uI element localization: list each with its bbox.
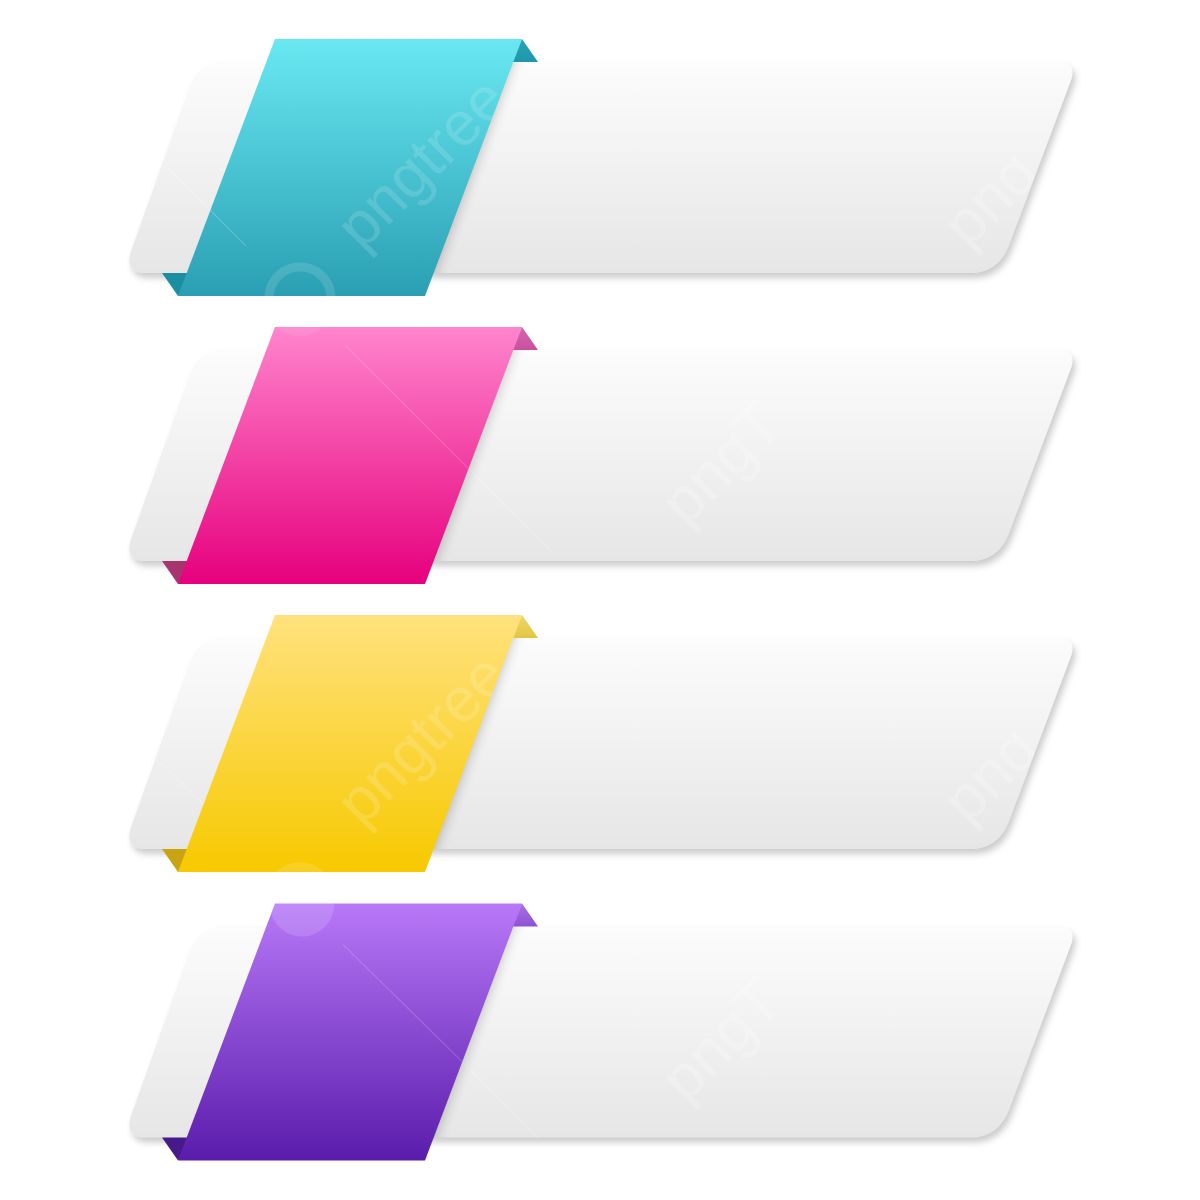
ribbon: cyan bbox=[178, 39, 522, 296]
watermark: card 1 bbox=[170, 138, 1051, 260]
panel: white card 1 bbox=[129, 62, 1072, 273]
watermark: ribbon 1: pngtree bbox=[323, 64, 521, 262]
watermark: ribbon 3 bbox=[276, 664, 498, 872]
banner row 2: pink bbox=[129, 327, 1078, 584]
watermark: card 4 bbox=[462, 966, 796, 1140]
banner row 1: cyan bbox=[129, 39, 1072, 329]
ribbon: purple bbox=[178, 904, 522, 1160]
watermark: card 3 bbox=[160, 714, 1051, 842]
ribbon shadow 2 bbox=[434, 350, 520, 561]
ribbon: pink bbox=[178, 327, 522, 584]
watermark line: ribbon 2 bbox=[278, 327, 468, 468]
panel: white card 4 bbox=[129, 926, 1072, 1138]
ribbon fold: bottom left 2 bbox=[162, 561, 188, 584]
ribbon fold: bottom left 3 bbox=[162, 849, 188, 872]
banner row 4: purple bbox=[129, 904, 1078, 1160]
ribbon fold: top right 3 bbox=[513, 615, 538, 638]
panel: white card 3 bbox=[129, 638, 1072, 849]
ribbon shadow 3 bbox=[434, 638, 520, 849]
watermark: ribbon 1 bbox=[210, 88, 498, 296]
panel: white card 2 bbox=[129, 350, 1072, 561]
ribbon fold: bottom left 1 bbox=[162, 273, 188, 296]
ribbon fold: top right 4 bbox=[513, 904, 538, 926]
watermark: ribbon 3: pngtree bbox=[323, 640, 521, 838]
watermark: card 2 bbox=[468, 389, 796, 550]
watermark: card 2: pngT bbox=[647, 389, 796, 538]
watermark logo: ribbon 4 bbox=[272, 904, 462, 1062]
banner row 3: yellow bbox=[129, 615, 1072, 929]
ribbon shadow 4 bbox=[434, 926, 520, 1138]
watermark: card 4: pngT bbox=[647, 966, 796, 1114]
ribbon fold: bottom left 4 bbox=[162, 1138, 188, 1160]
ribbon fold: top right 1 bbox=[513, 39, 538, 62]
watermark: card 1: png bbox=[929, 138, 1051, 260]
ribbon: yellow bbox=[178, 615, 522, 872]
ribbon shadow 1 bbox=[434, 62, 520, 273]
ribbon fold: top right 2 bbox=[513, 327, 538, 350]
watermark: card 3: png bbox=[929, 714, 1051, 836]
